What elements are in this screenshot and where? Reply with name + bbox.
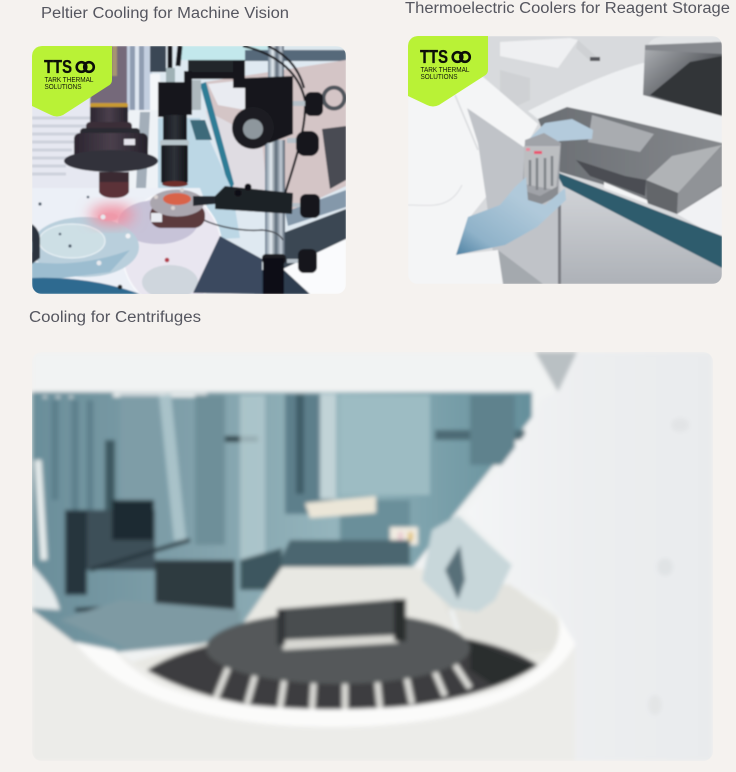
logo badge	[32, 46, 112, 116]
instrument cover box	[643, 36, 722, 116]
cables	[194, 46, 305, 240]
logo badge	[408, 36, 488, 106]
teal trim	[556, 172, 722, 268]
panel: machine vision photo	[31, 46, 346, 308]
camera and lens	[158, 46, 245, 187]
rotor bracket	[277, 599, 406, 650]
sliding bracket	[193, 184, 293, 214]
bowl rim and body	[34, 616, 572, 758]
upper housing	[32, 352, 578, 652]
rotor teeth	[146, 636, 539, 712]
ring light	[150, 188, 205, 228]
dark equipment behind glass	[60, 500, 282, 650]
panel: reagent storage photo	[408, 36, 722, 284]
lab coat	[408, 70, 538, 284]
rotor disc	[206, 612, 470, 684]
bowl interior	[136, 563, 560, 670]
gloved hand	[422, 515, 512, 630]
panel: centrifuge photo	[32, 352, 713, 761]
support pole	[262, 46, 286, 294]
objective lens stack	[64, 46, 158, 198]
heading: centrifuges: Cooling for Centrifuges	[29, 309, 201, 326]
side knobs	[287, 92, 323, 273]
heading: reagent storage: Thermoelectric Coolers for Reagent Storage	[405, 0, 730, 17]
reagent rack	[522, 133, 561, 205]
mounting block and knob	[232, 76, 293, 149]
gloved hand on visor	[530, 118, 594, 142]
scene background	[32, 46, 346, 294]
tinted glass lid	[32, 392, 532, 652]
table and glass plate	[32, 187, 346, 294]
lab coat	[500, 352, 691, 710]
dark visor	[538, 107, 722, 214]
heading: machine vision: Peltier Cooling for Machine Vision	[41, 5, 289, 22]
room and counter	[462, 36, 722, 254]
gloved hand holding rack	[456, 177, 566, 255]
lower cabinet	[465, 107, 722, 284]
